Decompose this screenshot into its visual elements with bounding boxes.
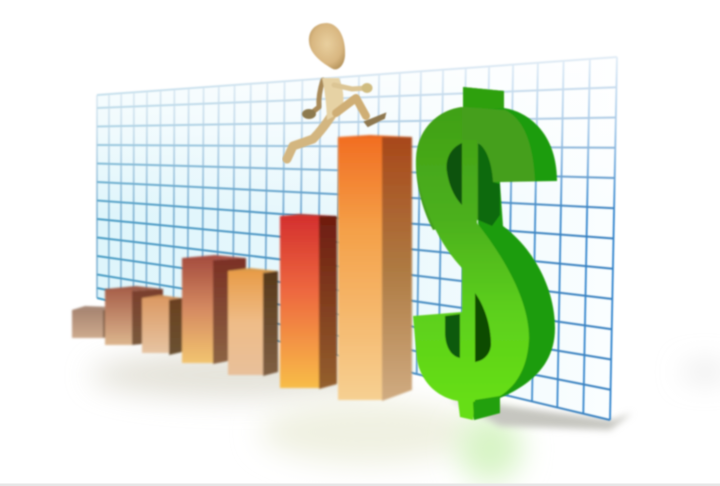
bar 4 [182,255,246,364]
bar 2 [105,286,163,345]
bar 7 [338,135,412,401]
bar 5 [228,268,278,376]
dollar sign: main body front face [413,107,529,420]
figure: foot [365,114,385,126]
dollar sign [413,87,557,420]
figure: back leg [287,110,335,159]
dollar sign: arm front face [416,107,535,230]
dollar sign: lower stem side [473,396,500,420]
wooden figure leaping onto the tallest bar [287,23,385,159]
figure: front arm [334,85,367,89]
floor reflection and shadows [0,351,720,486]
bar chart: seven rising bars [72,135,412,401]
bar 3 [142,295,182,355]
dollar sign: lower left counter [445,314,460,358]
blue perspective grid [80,45,630,420]
figure: back arm [309,80,323,115]
figure: torso [322,78,343,120]
dollar sign: dark extruded side [463,87,557,420]
dollar sign: upper stem and arm [463,87,504,110]
bar 6 [280,214,337,389]
figure: front leg [336,98,366,116]
figure: head [309,23,345,69]
figure: hand [302,109,316,119]
dollar sign: upper right counter [478,143,500,226]
dollar sign: lower right counter [475,293,491,362]
dollar sign: upper left counter [447,143,462,205]
bar 1 [72,306,112,338]
